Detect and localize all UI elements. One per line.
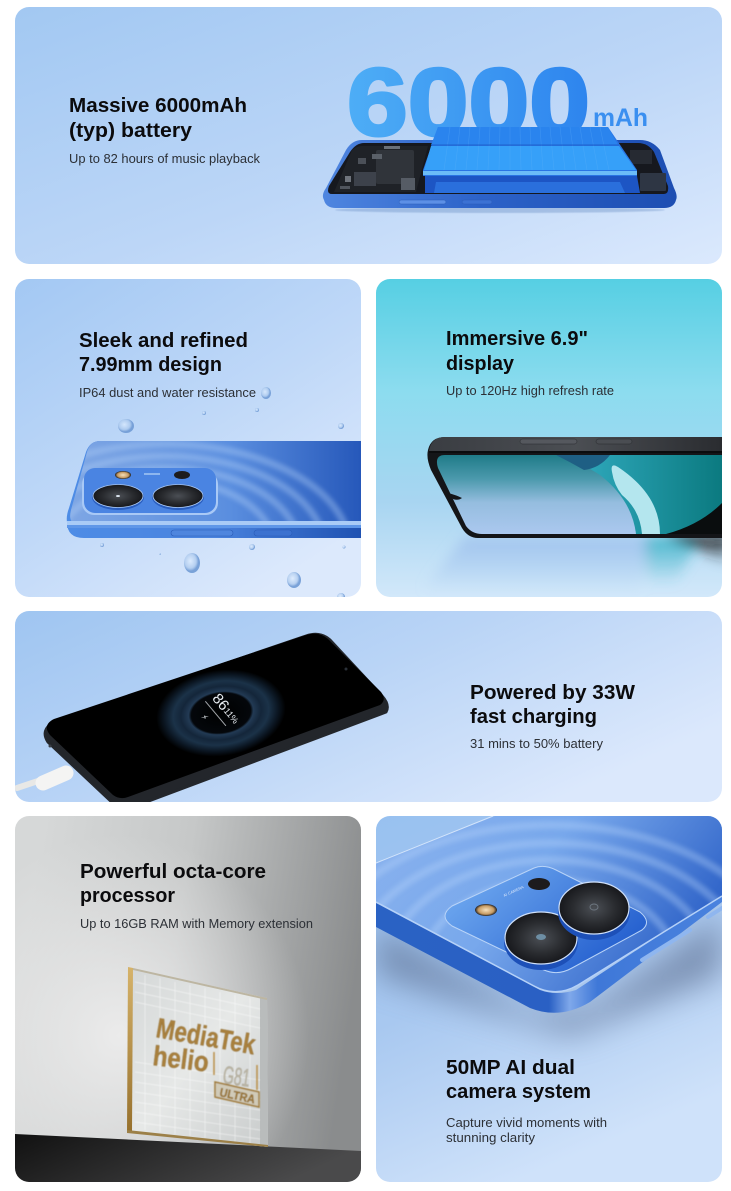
heading: design: Sleek and refined [79,329,248,352]
heading: battery: (typ) battery [69,119,193,142]
heading: battery: Massive 6000mAh [69,94,247,117]
heading: processor: Powerful octa-core [80,860,266,883]
text: charging description: 31 mins to 50% battery [470,737,604,751]
phone back close-up [376,816,722,1013]
screen reflection [440,536,722,584]
phone with charger [17,634,387,809]
panel: battery [15,7,722,264]
heading: display [446,327,588,375]
camera island [82,468,218,515]
chip logo [151,1012,259,1107]
text: battery description: Up to 82 hours of music playback [69,152,261,166]
heading: battery [69,94,247,142]
text: camera description: stunning clarity [446,1131,536,1145]
heading: charging: Powered by 33W [470,681,636,704]
heading: camera: 50MP AI dual [446,1056,575,1079]
chip logo: ULTRA [218,1085,257,1106]
panel: charging [15,611,722,809]
text: processor description: Up to 16GB RAM with Memory extension [80,917,313,931]
phone shadow [376,915,722,1035]
text: camera description: Capture vivid moments with [446,1116,607,1130]
heading: processor [80,860,266,907]
heading: camera [446,1056,591,1103]
heading: processor: processor [80,884,175,907]
big number 6000: 6000 [347,49,590,156]
text: display description: Up to 120Hz high refresh rate [446,384,614,398]
text: camera description [446,1116,607,1145]
heading: charging [470,681,636,728]
text: design description: IP64 dust and water resistance [79,386,256,400]
camera island [445,866,647,973]
phone with battery [323,127,677,213]
flash and sensor: AI CAMERA [502,884,525,898]
panel: display [376,279,730,597]
flash and sensor [475,878,550,916]
heading: display: display [446,352,515,375]
lenses [504,882,630,970]
heading: design: 7.99mm design [79,353,222,376]
panel: design [15,279,361,597]
heading: charging: fast charging [470,705,597,728]
heading: display: Immersive 6.9" [446,327,588,350]
heading: design [79,329,248,376]
unit mAh: mAh [593,104,648,132]
charging rings: 11% [222,706,241,726]
heading: camera: camera system [446,1080,591,1103]
charging rings: ⚡ [199,712,210,723]
chip logo: G81 [221,1061,252,1093]
platform [15,1134,361,1182]
wallpaper [437,455,722,534]
water droplets [100,387,346,601]
charging rings [158,671,284,756]
panel: processor [15,816,361,1182]
charging rings: 86 [209,690,232,714]
panel: camera [376,816,722,1182]
phone front view [427,437,722,538]
chip logo: helio [151,1040,211,1078]
usb cable [17,773,66,788]
chip logo: MediaTek [154,1012,258,1060]
phone back view [66,441,361,538]
chip [127,967,268,1147]
